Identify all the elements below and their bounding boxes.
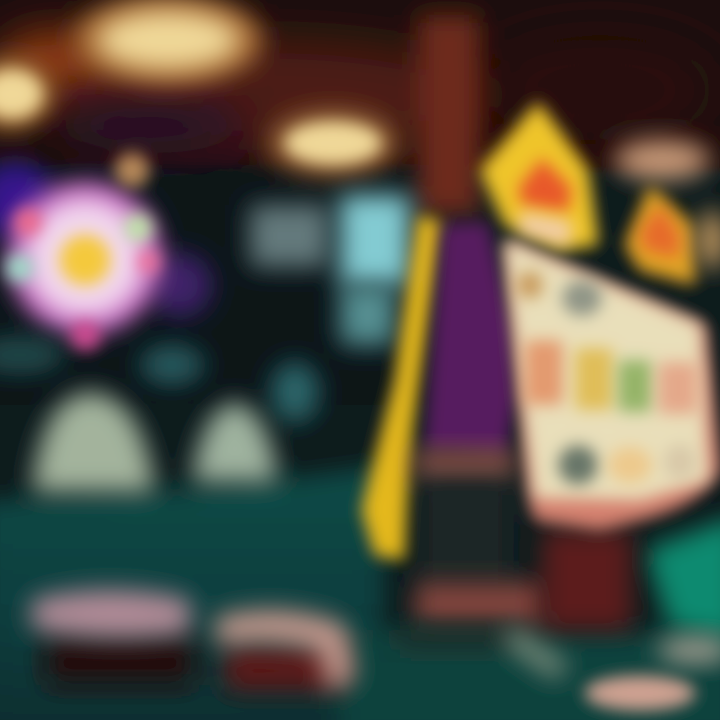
yellow banner — [362, 215, 442, 560]
prize wheel — [0, 153, 212, 350]
dark chip stack centre — [400, 450, 545, 650]
ceiling lights — [0, 0, 710, 180]
poker chips right — [505, 625, 720, 710]
slot machine flame crowns — [480, 102, 720, 285]
slot screens — [0, 195, 410, 422]
poker chips left — [32, 590, 355, 690]
slot machine panel — [505, 240, 720, 530]
pale stools — [32, 392, 278, 492]
purple banner — [425, 222, 515, 455]
green table — [0, 465, 720, 720]
red chip stack right — [542, 530, 632, 630]
wooden pillar — [418, 15, 480, 215]
